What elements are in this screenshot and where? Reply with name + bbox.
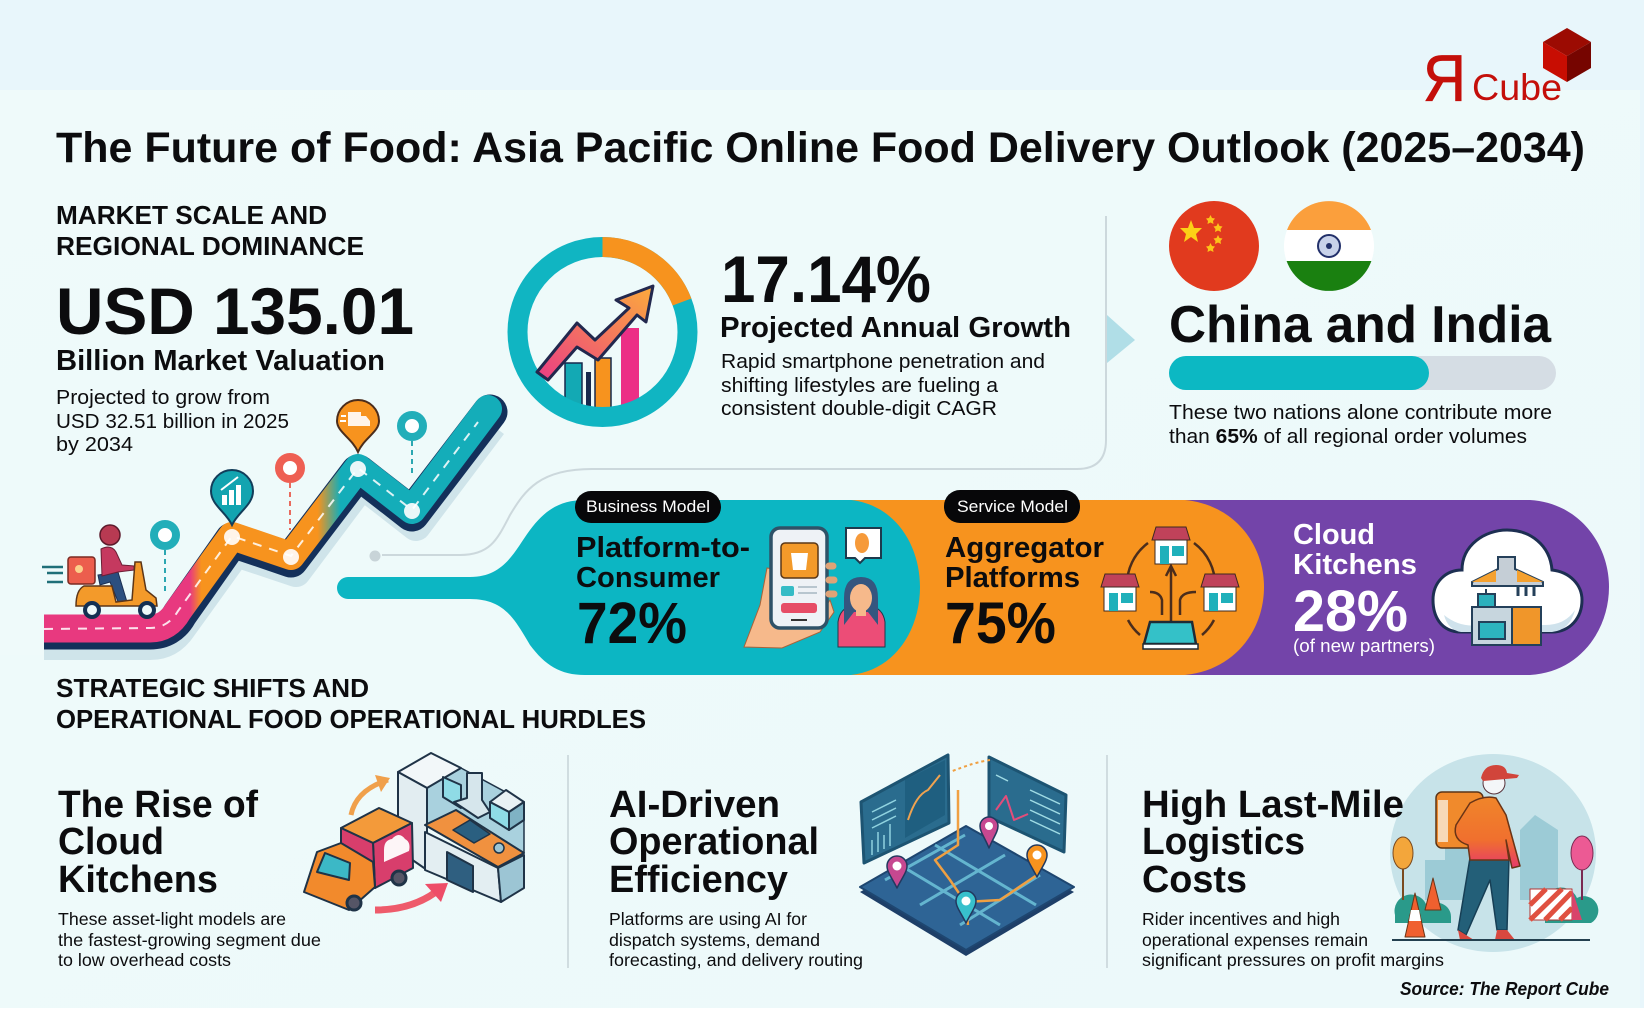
panel: cloud kitchens segment (1100, 500, 1609, 675)
arrow to China and India (1107, 315, 1135, 363)
panel: cloud kitchens segment: Kitchens (1293, 549, 1417, 581)
pill: business model: Business Model (586, 497, 710, 516)
panel: AI-driven efficiency: Efficiency (609, 859, 788, 901)
logo: RCube: Я (1423, 41, 1466, 115)
market valuation stat: USD 135.01 (56, 274, 414, 348)
panel: aggregator platforms segment: 75% (945, 591, 1056, 656)
icon: kitchen and truck (304, 753, 524, 910)
market valuation stat (56, 274, 414, 456)
title: The Future of Food: Asia Pacific Online Food Delivery Outlook (2025–2034) (56, 124, 1585, 172)
connector line (382, 216, 1106, 555)
China and India stat: than 65% of all regional order volumes (1169, 425, 1527, 448)
progress bar (1169, 356, 1556, 390)
market valuation stat: USD 32.51 billion in 2025 (56, 410, 289, 433)
chart: growth donut (518, 247, 688, 417)
pill: service model: Service Model (957, 497, 1068, 516)
panel: rise of cloud kitchens: Kitchens (58, 859, 218, 901)
panel: platform-to-consumer segment (337, 491, 920, 675)
heading: market scale (56, 200, 364, 261)
panel: AI-driven efficiency: Operational (609, 821, 819, 863)
panel: AI-driven efficiency: Platforms are using AI for (609, 909, 807, 929)
market valuation stat: Projected to grow from (56, 386, 270, 409)
panel: aggregator platforms segment: Platforms (945, 562, 1080, 594)
growth stat: 17.14% (721, 242, 931, 316)
growth stat: shifting lifestyles are fueling a (721, 374, 999, 397)
pill: service model (944, 490, 1080, 523)
panel: cloud kitchens segment: 28% (1293, 579, 1408, 644)
panel: rise of cloud kitchens: These asset-light models are (58, 909, 286, 929)
icon: phone and hand (744, 528, 834, 648)
icon: customer with chat bubble (838, 528, 885, 647)
panel: cloud kitchens segment: Cloud (1293, 519, 1375, 551)
China and India stat: China and India (1169, 296, 1552, 354)
logo: RCube: Cube (1472, 67, 1562, 108)
heading: strategic shifts (56, 673, 646, 734)
panel: cloud kitchens segment: (of new partners) (1293, 635, 1435, 656)
panel: last-mile logistics costs: High Last-Mile (1142, 784, 1404, 826)
logo: RCube (1423, 28, 1591, 115)
China and India stat: These two nations alone contribute more (1169, 401, 1552, 424)
growth stat: Rapid smartphone penetration and (721, 350, 1045, 373)
panel: last-mile logistics costs (1142, 784, 1444, 970)
panel: last-mile logistics costs: Costs (1142, 859, 1247, 901)
pin: growth chart (211, 470, 253, 525)
panel: aggregator platforms segment: Aggregator (945, 532, 1104, 564)
panel: rise of cloud kitchens: the fastest-growing segment due (58, 930, 321, 950)
panel: last-mile logistics costs: significant pressures on profit margins (1142, 950, 1444, 970)
source note: Source: The Report Cube (1400, 979, 1609, 999)
connector dot (370, 550, 380, 562)
icon: China flag (1169, 201, 1259, 291)
panel: rise of cloud kitchens: The Rise of (58, 784, 258, 826)
growth stat (720, 242, 1071, 420)
heading: strategic shifts: STRATEGIC SHIFTS AND (56, 673, 369, 703)
growth road with scooter and pins (0, 400, 492, 655)
panel: platform-to-consumer segment: Platform-to- (576, 532, 750, 564)
icon: cloud kitchen (1433, 530, 1582, 645)
growth stat: Projected Annual Growth (720, 312, 1071, 344)
icon: India flag (1284, 201, 1374, 291)
pin: ring teal 1 (154, 524, 176, 593)
market valuation stat: Billion Market Valuation (56, 345, 385, 377)
panel: AI-driven efficiency: dispatch systems, demand (609, 930, 820, 950)
icon: delivery rider with obstacles (1390, 754, 1598, 952)
panel: platform-to-consumer segment: Consumer (576, 562, 720, 594)
panel: AI-driven efficiency: forecasting, and delivery routing (609, 950, 863, 970)
pill: business model (575, 491, 721, 523)
market valuation stat: by 2034 (56, 433, 133, 456)
panel: aggregator platforms segment (800, 490, 1264, 675)
pin: ring coral (279, 457, 301, 530)
panel: rise of cloud kitchens (58, 753, 524, 970)
divider (1106, 755, 1108, 968)
panel: last-mile logistics costs: Logistics (1142, 821, 1305, 863)
panel: rise of cloud kitchens: to low overhead costs (58, 950, 231, 970)
pin: ring teal 2 (401, 415, 423, 477)
pin: delivery truck (337, 400, 379, 452)
panel: last-mile logistics costs: Rider incentives and high (1142, 909, 1340, 929)
panel: last-mile logistics costs: operational expenses remain (1142, 930, 1368, 950)
icon: scooter rider (42, 525, 157, 617)
icon: AI map and dashboards (860, 755, 1074, 956)
China and India stat (1169, 296, 1556, 448)
icon: aggregator network (1101, 527, 1239, 649)
divider (567, 755, 569, 968)
heading: market scale: REGIONAL DOMINANCE (56, 231, 364, 261)
panel: AI-driven efficiency: AI-Driven (609, 784, 780, 826)
heading: market scale: MARKET SCALE AND (56, 200, 327, 230)
panel: platform-to-consumer segment: 72% (577, 591, 687, 656)
panel: rise of cloud kitchens: Cloud (58, 821, 164, 863)
growth stat: consistent double-digit CAGR (721, 397, 997, 420)
heading: strategic shifts: OPERATIONAL FOOD OPERATIONAL HURDLES (56, 704, 646, 734)
panel: AI-driven efficiency (609, 755, 1074, 970)
